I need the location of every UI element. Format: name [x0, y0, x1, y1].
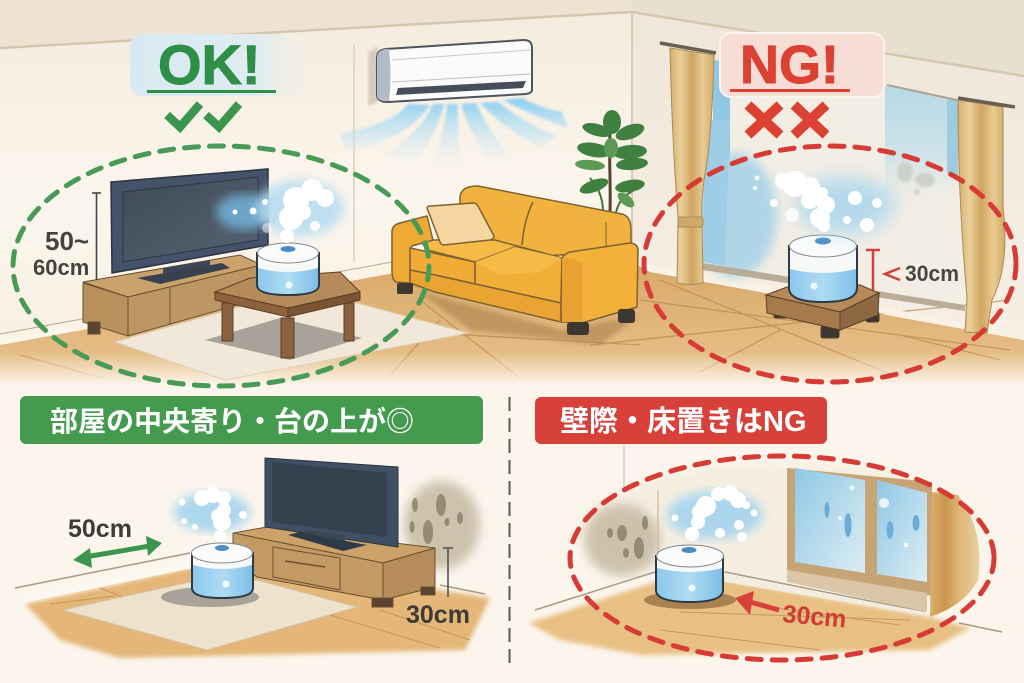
left curtain: [670, 48, 714, 284]
baseboards: [535, 572, 655, 610]
icon: x marks: [748, 105, 826, 135]
sofa back: [460, 186, 631, 262]
seat left front: [410, 248, 475, 284]
green heading: [20, 396, 483, 444]
height marker 30cm: 30cm: [406, 601, 470, 629]
left arm: [392, 216, 433, 283]
red dashed ellipse: [644, 146, 1016, 382]
sofa base: [410, 270, 561, 322]
height marker 50-60cm: 50~: [45, 226, 89, 256]
OK badge: [130, 33, 320, 127]
red height marker: [866, 250, 959, 290]
red arrow 30cm: [735, 591, 848, 634]
sofa floor shadow: [420, 292, 640, 345]
cushion: [427, 203, 494, 245]
tv: [265, 458, 398, 551]
mold on wall: [584, 504, 660, 576]
rug: [115, 290, 468, 380]
panel: bottom right NG corner: [529, 445, 1002, 660]
green double arrow 50cm: 50cm: [68, 515, 132, 543]
OK badge: OK!: [158, 33, 261, 96]
humidifier shadow: [644, 591, 736, 609]
window: [693, 60, 965, 311]
floor: [529, 580, 970, 655]
icon: check marks: [167, 104, 239, 127]
cold air streams: [340, 98, 568, 166]
green dashed ellipse: [13, 146, 429, 386]
seat top: [420, 240, 562, 290]
panel: top living room: [0, 0, 1024, 386]
humidifier: [656, 545, 724, 602]
green heading: 部屋の中央寄り・台の上が◎: [50, 405, 414, 437]
air conditioner: [340, 40, 568, 166]
red dashed ellipse: [570, 456, 994, 660]
mold on wall: [404, 481, 480, 569]
right curtain: [958, 100, 1005, 333]
NG badge: [720, 33, 884, 135]
height marker 50-60cm: 60cm: [33, 255, 89, 280]
upper wall bands: [0, 0, 632, 48]
height marker 50-60cm: [33, 193, 101, 280]
floor: [0, 262, 1024, 385]
tv stand: [83, 255, 262, 336]
NG scene: [644, 43, 1016, 382]
humidifier: [789, 235, 857, 302]
yellow sofa: [392, 186, 640, 345]
large tv: [111, 169, 268, 284]
rug: [63, 580, 357, 650]
red heading: 壁際・床置きはNG: [560, 405, 807, 438]
mist cloud: [174, 487, 250, 542]
wall inside ring: [585, 463, 975, 587]
seat right front: [475, 247, 562, 303]
red heading: [535, 397, 827, 444]
green double arrow 50cm: [68, 515, 162, 568]
humidifier: [192, 543, 253, 598]
OK scene: [13, 146, 468, 386]
mist cloud: [667, 485, 763, 542]
curtain rods: [660, 43, 1015, 107]
legs: [397, 283, 635, 335]
table shadow: [205, 318, 362, 360]
height marker 30cm: [406, 548, 470, 629]
center divider: [508, 397, 510, 664]
tv stand: [233, 527, 435, 607]
right arm: [561, 243, 638, 323]
right wall: [632, 0, 1024, 335]
humidifier shadow: [161, 587, 259, 607]
panel: bottom left OK corner: [15, 458, 490, 658]
baseboards: [0, 266, 392, 338]
low stand: [766, 285, 879, 338]
humidifier: [257, 243, 319, 295]
NG badge: NG!: [740, 35, 839, 95]
floor fade: [0, 352, 1024, 386]
mist cloud: [216, 179, 344, 243]
red arrow 30cm: 30cm: [781, 600, 848, 634]
mist cloud: [753, 171, 895, 233]
plant: [575, 110, 648, 212]
floor: [25, 566, 490, 658]
left wall: [0, 0, 632, 335]
window: [787, 468, 932, 612]
coffee table: [215, 272, 360, 358]
red height marker: 30cm: [905, 261, 959, 286]
baseboard: [15, 553, 190, 588]
curtain: [930, 492, 979, 617]
